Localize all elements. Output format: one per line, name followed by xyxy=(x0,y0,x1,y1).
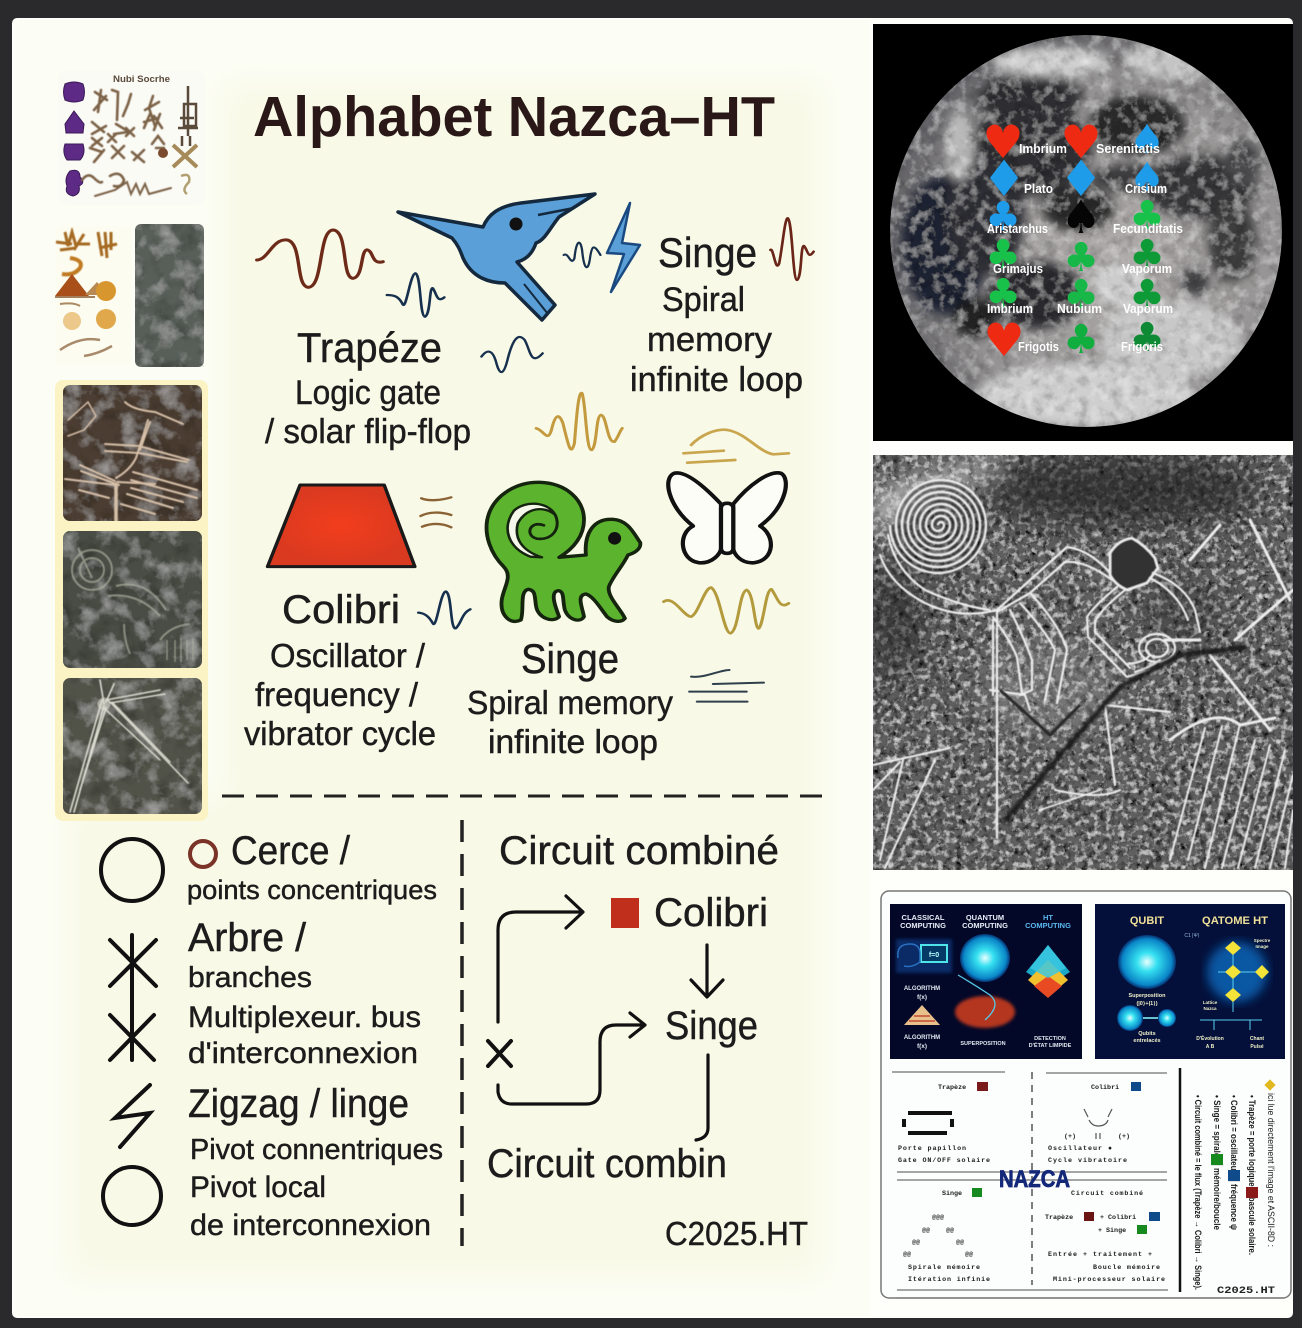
moon suit markers: ♣ xyxy=(1129,232,1165,278)
text: symbols legend: branches xyxy=(188,962,312,994)
text: Trapéze block: Logic gate xyxy=(295,374,441,412)
image: qubit / qatome HT: (|0⟩+|1⟩) xyxy=(1136,1000,1158,1007)
wave: navy near bolt xyxy=(564,243,600,267)
text: Singe center block: Spiral memory xyxy=(467,684,673,721)
image: qubit / qatome HT: Qubits xyxy=(1138,1031,1156,1037)
ascii diagram panel: + Colibri xyxy=(1100,1214,1136,1222)
wave: dark lines xyxy=(689,670,764,702)
text: symbols legend: Pivot connentriques xyxy=(190,1134,443,1166)
wave decorations, middle group xyxy=(268,430,789,702)
text: symbols legend: Pivot local xyxy=(190,1171,326,1204)
icon: butterfly xyxy=(668,473,786,563)
ascii diagram panel: (+) xyxy=(1118,1133,1130,1141)
arrow: to Singe xyxy=(498,1013,645,1104)
sidebar thumbnail: symbols sheet: Nubi Socrhe xyxy=(113,74,170,84)
moon suit markers: ♣ xyxy=(985,232,1021,278)
text: Trapéze block xyxy=(265,324,471,451)
icon: red trapezoid xyxy=(268,485,415,567)
icon: circle xyxy=(101,839,163,901)
text: Trapéze block: / solar flip-flop xyxy=(265,413,471,451)
text: Singe right block xyxy=(630,229,803,399)
ascii diagram panel: Mini-processeur solaire xyxy=(1053,1276,1165,1284)
image: qubit / qatome HT: Spectre xyxy=(1254,938,1271,943)
spiral xyxy=(890,480,986,573)
image: classical / quantum / HT computing: f(x) xyxy=(917,994,927,1001)
image: classical / quantum / HT computing: f(x) xyxy=(917,1043,927,1050)
image: classical / quantum / HT computing: HT xyxy=(1043,913,1053,922)
panel: monkey geoglyph photo xyxy=(865,454,1293,870)
wave decorations, upper group xyxy=(257,218,814,450)
text: symbols legend: Multiplexeur. bus xyxy=(188,1001,421,1034)
moon suit markers: ♣ xyxy=(1063,317,1099,363)
image: qubit / qatome HT: Chant xyxy=(1250,1036,1264,1042)
moon xyxy=(890,35,1282,427)
image: classical / quantum / HT computing: D'ÉTAT LIMPIDE xyxy=(1029,1041,1072,1049)
ascii diagram panel xyxy=(892,1072,1285,1298)
ascii diagram panel: @@ xyxy=(912,1239,920,1247)
moon labels: Crisium xyxy=(1125,181,1167,196)
image: qubit / qatome HT: Lattice xyxy=(1203,1000,1218,1005)
moon suit markers: ♠ xyxy=(1129,117,1165,163)
image: qubit / qatome HT: Pulsé xyxy=(1250,1044,1264,1050)
wave: brown large xyxy=(257,230,383,287)
monkey outline xyxy=(873,520,1293,868)
photo: brown geoglyph xyxy=(63,385,202,521)
icon: lower circle xyxy=(103,1167,161,1225)
text: Singe center block xyxy=(467,635,673,760)
ascii diagram panel: Cycle vibratoire xyxy=(1048,1157,1127,1165)
image: qubit / qatome HT: entrelacés xyxy=(1133,1038,1161,1044)
ascii diagram panel: Oscillateur ● xyxy=(1048,1145,1112,1153)
moon suit markers: ♠ xyxy=(1060,190,1102,244)
sidebar thumbnail: grey stone xyxy=(135,224,204,367)
moon labels: Plato xyxy=(1024,181,1053,196)
wave: navy beside Colibri xyxy=(418,592,470,628)
image: qubit / qatome HT: QATOME HT xyxy=(1202,915,1268,927)
ascii diagram panel: Entrée + traitement + xyxy=(1048,1251,1152,1259)
icon: small red circle xyxy=(190,841,216,867)
moon labels: Serenitatis xyxy=(1096,141,1160,156)
moon suit markers: ♥ xyxy=(983,313,1025,367)
image: qubit / qatome HT: D'Évolution xyxy=(1196,1034,1224,1042)
moon suit markers xyxy=(982,115,1165,367)
text: symbols legend: Zigzag / linge xyxy=(188,1082,409,1126)
text: Colibri block: Oscillator / xyxy=(270,637,426,674)
panel: moon map xyxy=(873,24,1293,441)
ascii diagram panel: Circuit combiné xyxy=(1071,1190,1143,1198)
wave: short lines beside trapezoid xyxy=(421,497,451,527)
moon suit markers: ♦ xyxy=(982,150,1026,208)
image: classical / quantum / HT computing xyxy=(890,904,1082,1059)
image: classical / quantum / HT computing: DETECTION xyxy=(1034,1036,1066,1042)
ascii diagram panel: Itération infinie xyxy=(908,1276,990,1284)
text: symbols legend: de interconnexion xyxy=(190,1209,431,1242)
wave: navy under bird xyxy=(387,273,444,317)
text: Singe right block: Spiral xyxy=(662,281,745,319)
sidebar photo strip xyxy=(55,380,208,821)
ascii diagram panel: Boucle mémoire xyxy=(1093,1264,1160,1272)
image: classical / quantum / HT computing: SUPERPOSITION xyxy=(960,1041,1006,1047)
text: Singe right block: Singe xyxy=(658,229,757,276)
text: Colibri block: vibrator cycle xyxy=(244,715,436,752)
text: symbols legend: Arbre / xyxy=(188,916,307,960)
text: Trapéze block: Trapéze xyxy=(297,324,442,371)
image: qubit / qatome HT: C1 |Ψ⟩ xyxy=(1184,933,1200,939)
arrow: Colibri to Singe xyxy=(691,945,723,997)
image: classical / quantum / HT computing: CLASSICAL xyxy=(902,913,945,922)
ascii diagram panel: Singe xyxy=(942,1190,962,1198)
ascii diagram panel: Trapèze xyxy=(938,1084,966,1092)
text: Colibri block xyxy=(244,588,436,752)
arrow: Singe to output xyxy=(696,1055,708,1140)
ascii diagram panel: @@@ xyxy=(932,1214,944,1222)
wave: gold hump xyxy=(683,430,789,463)
image: classical / quantum / HT computing: COMPUTING xyxy=(1025,921,1071,930)
icon: cross xyxy=(488,1041,511,1066)
image: classical / quantum / HT computing: COMPUTING xyxy=(900,921,946,930)
symbols column xyxy=(101,839,216,1225)
ascii diagram panel: @@ xyxy=(946,1227,954,1235)
rotated notes: ici lue directement l'image et ASCII-8D : xyxy=(1265,1093,1276,1247)
moon labels: Vaporum xyxy=(1122,261,1172,276)
rotated notes xyxy=(1180,1068,1276,1292)
ascii diagram panel: Spirale mémoire xyxy=(908,1264,980,1272)
left main panel xyxy=(14,20,870,1316)
image: qubit / qatome HT: Superposition xyxy=(1129,993,1166,999)
combined circuit diagram: Circuit combin xyxy=(487,1142,727,1186)
image: classical / quantum / HT computing: QUANTUM xyxy=(966,913,1004,922)
image: classical / quantum / HT computing: COMPUTING xyxy=(962,921,1008,930)
image: qubit / qatome HT xyxy=(1095,904,1285,1059)
ascii diagram panel: Porte papillon xyxy=(898,1145,966,1153)
image: classical / quantum / HT computing: ALGORITHM xyxy=(904,986,940,992)
title: Alphabet Nazca–HT xyxy=(253,85,775,149)
moon suit markers: ♥ xyxy=(982,115,1024,169)
image: qubit / qatome HT: A B xyxy=(1206,1044,1215,1050)
wave: navy below bird xyxy=(481,337,543,372)
text: Singe right block: memory xyxy=(647,321,772,359)
ascii diagram panel: @@ xyxy=(922,1227,930,1235)
rotated notes: • Singe = spirale ▉ mémoire/boucle xyxy=(1211,1095,1223,1230)
arrow: to Colibri xyxy=(498,896,583,1022)
ascii diagram panel: Colibri xyxy=(1091,1084,1119,1092)
combined circuit diagram: C2025.HT xyxy=(665,1215,808,1252)
text: Singe center block: Singe xyxy=(521,635,619,682)
text: Singe center block: infinite loop xyxy=(488,723,658,760)
icon: lightning bolt xyxy=(607,203,640,292)
ascii diagram panel: (+) xyxy=(1064,1133,1076,1141)
rotated notes: • Colibri = oscillateur ▉ fréquence ψ xyxy=(1228,1095,1240,1230)
ascii diagram panel: + Singe xyxy=(1098,1227,1126,1235)
moon labels: Vaporum xyxy=(1123,301,1173,316)
moon labels: Grimajus xyxy=(993,261,1043,276)
icon: zigzag xyxy=(115,1085,150,1147)
ascii diagram panel: @@ xyxy=(903,1251,911,1259)
moon labels xyxy=(987,141,1183,354)
photo: grey hummingbird xyxy=(63,678,202,814)
ascii diagram panel: Trapèze xyxy=(1045,1214,1073,1222)
image: qubit / qatome HT: QUBIT xyxy=(1130,915,1164,927)
moon labels: Imbrium xyxy=(1019,141,1067,156)
moon suit markers: ♠ xyxy=(1129,155,1165,201)
text: symbols legend: d'interconnexion xyxy=(188,1037,418,1070)
combined circuit diagram: Circuit combiné xyxy=(499,829,779,873)
moon suit markers: ♣ xyxy=(1129,315,1165,361)
icon: branches xyxy=(110,935,156,1060)
text: Singe right block: infinite loop xyxy=(630,361,803,399)
moon suit markers: ♣ xyxy=(1063,235,1099,281)
moon suit markers: ♦ xyxy=(1059,150,1103,208)
image: qubit / qatome HT: Image xyxy=(1255,944,1269,949)
icon: blue hummingbird xyxy=(398,194,595,320)
moon suit markers: ♣ xyxy=(1129,272,1165,318)
ascii diagram panel: Gate ON/OFF solaire xyxy=(898,1157,990,1165)
image: qubit / qatome HT: Nazca xyxy=(1203,1006,1217,1011)
text: symbols legend: points concentriques xyxy=(187,875,437,905)
image: classical / quantum / HT computing: f=0 xyxy=(929,952,939,959)
combined circuit diagram: Colibri xyxy=(654,891,768,935)
photo: green-grey monkey xyxy=(63,531,202,668)
moon suit markers: ♣ xyxy=(1063,272,1099,318)
moon labels: Aristarchus xyxy=(987,221,1048,236)
moon labels: Imbrium xyxy=(987,301,1033,316)
moon suit markers: ♥ xyxy=(1060,115,1102,169)
moon suit markers: ♣ xyxy=(1129,193,1165,239)
sidebar thumbnail: symbols sheet xyxy=(58,70,205,205)
wave: gold xyxy=(536,393,622,450)
text: Colibri block: frequency / xyxy=(255,676,419,713)
wave: olive gold xyxy=(664,588,789,633)
ascii diagram panel: @@ xyxy=(965,1251,973,1259)
combined circuit diagram xyxy=(487,829,808,1252)
moon suit markers: ♣ xyxy=(985,194,1021,240)
rotated notes: • Trapèze = porte logique ▉ bascule solaire. xyxy=(1246,1095,1258,1255)
moon labels: Frigoris xyxy=(1121,339,1163,354)
sidebar thumbnail: orange sketches xyxy=(55,226,132,366)
label: NAZCA: NAZCA xyxy=(999,1166,1070,1193)
wave: brown right of Singe xyxy=(770,218,814,280)
combined circuit diagram: Singe xyxy=(665,1004,758,1048)
moon labels: Frigotis xyxy=(1018,339,1059,354)
text: symbols legend xyxy=(187,829,443,1242)
image: classical / quantum / HT computing: ALGORITHM xyxy=(904,1035,940,1041)
moon suit markers: ♣ xyxy=(985,271,1021,317)
icon: green monkey xyxy=(487,482,640,621)
moon labels: Fecunditatis xyxy=(1113,221,1183,236)
label: C2025.HT small: C2025.HT xyxy=(1217,1286,1275,1297)
text: symbols legend: Cerce / xyxy=(231,829,351,873)
text: Colibri block: Colibri xyxy=(282,588,400,632)
icon: red square xyxy=(611,898,639,928)
panel: computing card xyxy=(881,891,1291,1298)
ascii diagram panel: @@ xyxy=(956,1239,964,1247)
moon labels: Nubium xyxy=(1057,301,1102,316)
